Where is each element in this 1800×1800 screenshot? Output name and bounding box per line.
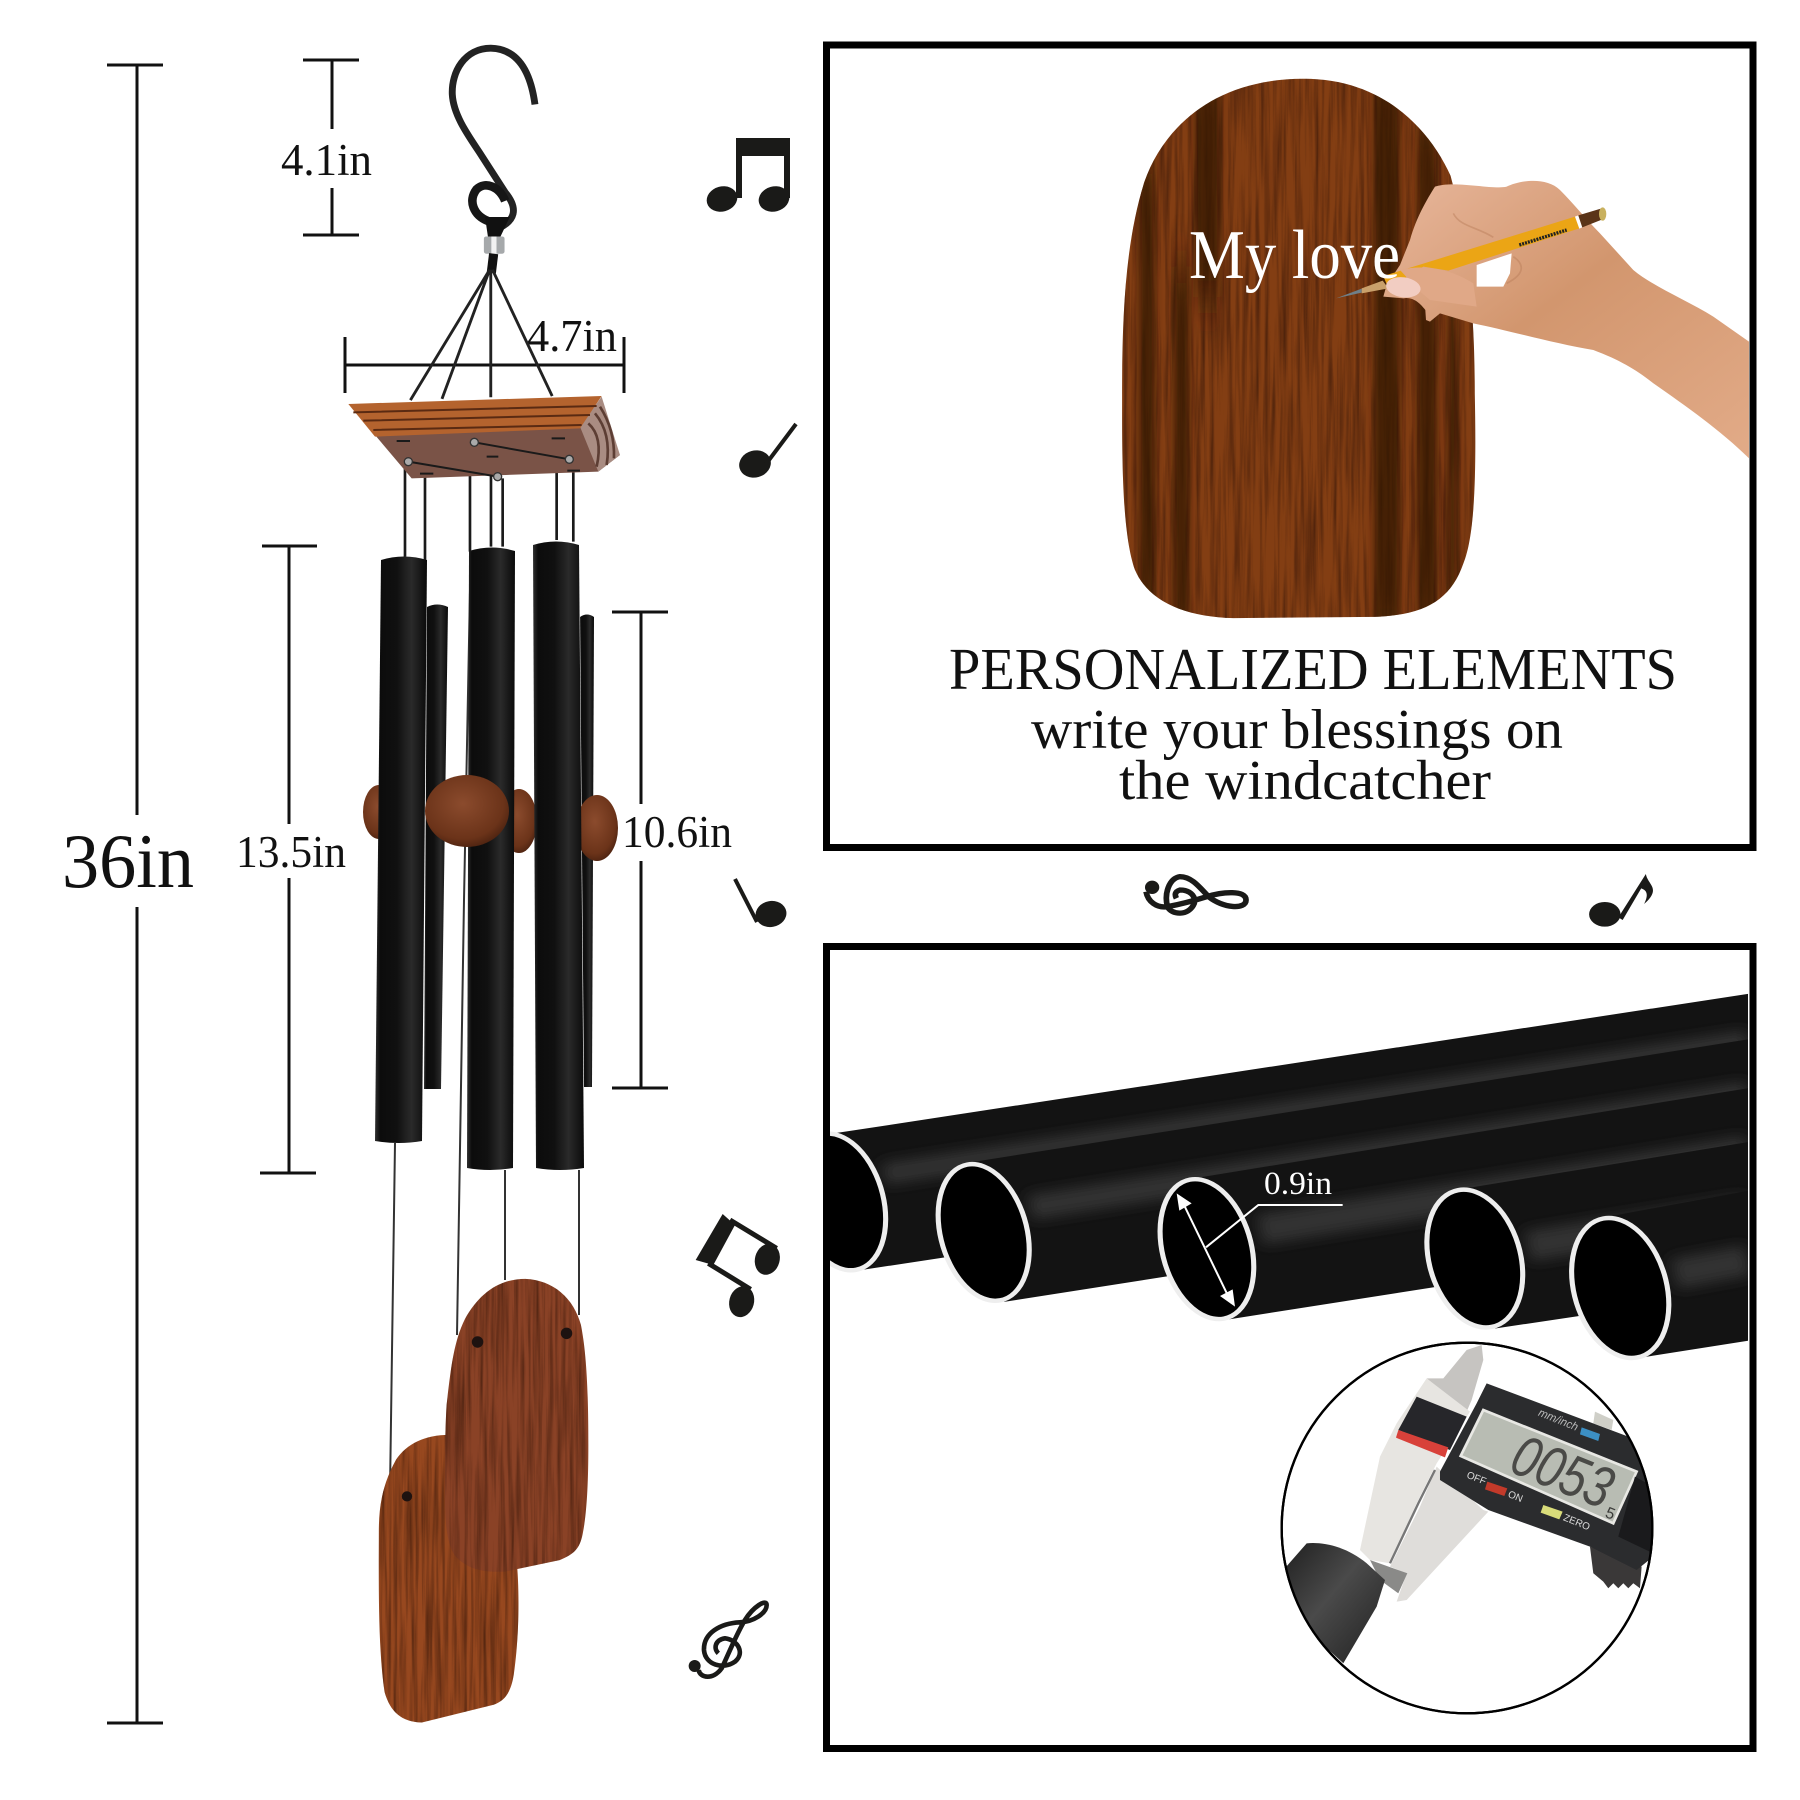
dimension: overall height 36in bbox=[62, 65, 194, 1723]
icon: quarter note bbox=[736, 424, 796, 481]
dimension: crossbar 4.7in bbox=[345, 311, 624, 393]
personalized wooden sail bbox=[1122, 61, 1475, 642]
caliper inset: 0053 bbox=[1502, 1422, 1623, 1521]
panel: personalized elements bbox=[826, 45, 1753, 848]
diameter label: 0.9in bbox=[1264, 1166, 1332, 1202]
dimension: crossbar 4.7in: 4.7in bbox=[527, 311, 617, 361]
icon: eighth note bbox=[1589, 874, 1653, 927]
caliper inset: ON bbox=[1506, 1489, 1524, 1505]
heading: PERSONALIZED ELEMENTS bbox=[949, 636, 1677, 702]
blessing text on wood: My love bbox=[1189, 217, 1400, 294]
dimension: long tube 13.5in: 13.5in bbox=[236, 827, 346, 877]
icon: sideways treble clef bbox=[1145, 877, 1246, 913]
dimension: short tube 10.6in: 10.6in bbox=[622, 807, 732, 857]
black metal tubes bbox=[780, 994, 1748, 1366]
icon: tilted beamed notes bbox=[696, 1214, 783, 1320]
dimension: long tube 13.5in bbox=[236, 546, 346, 1173]
dimension: hook 4.1in: 4.1in bbox=[281, 135, 372, 185]
caption: the windcatcher bbox=[1119, 750, 1491, 812]
icon: beamed eighth notes bbox=[704, 138, 792, 215]
wooden beads behind tubes bbox=[363, 785, 395, 839]
dimension: short tube 10.6in bbox=[612, 612, 732, 1088]
caliper inset: 5 bbox=[1603, 1505, 1618, 1524]
writing hand with pencil bbox=[1336, 181, 1749, 458]
caption: write your blessings on bbox=[1031, 699, 1563, 761]
wooden wind sails bbox=[379, 1279, 588, 1723]
long strings behind clappers bbox=[390, 590, 579, 1490]
icon: inverted note bbox=[735, 879, 789, 929]
dimension: overall height 36in: 36in bbox=[62, 818, 194, 904]
dimension: hook 4.1in bbox=[281, 60, 372, 235]
caliper inset: ZERO bbox=[1562, 1513, 1592, 1533]
caliper inset: OFF bbox=[1465, 1470, 1487, 1488]
arrow: tube diameter bbox=[1177, 1193, 1343, 1307]
wind chime product illustration bbox=[348, 48, 620, 1723]
icon: treble clef bbox=[689, 1603, 767, 1677]
caption bbox=[1031, 699, 1563, 812]
caliper inset bbox=[1282, 1343, 1653, 1713]
caliper inset: mm/inch bbox=[1537, 1407, 1580, 1434]
back chime tubes bbox=[424, 604, 448, 1089]
large wooden bead bbox=[425, 775, 509, 847]
panel: tube close-up bbox=[780, 946, 1753, 1748]
crossbar and hardware bbox=[348, 396, 620, 560]
S hook and hanging cords bbox=[410, 48, 552, 400]
front chime tubes bbox=[375, 556, 427, 1143]
